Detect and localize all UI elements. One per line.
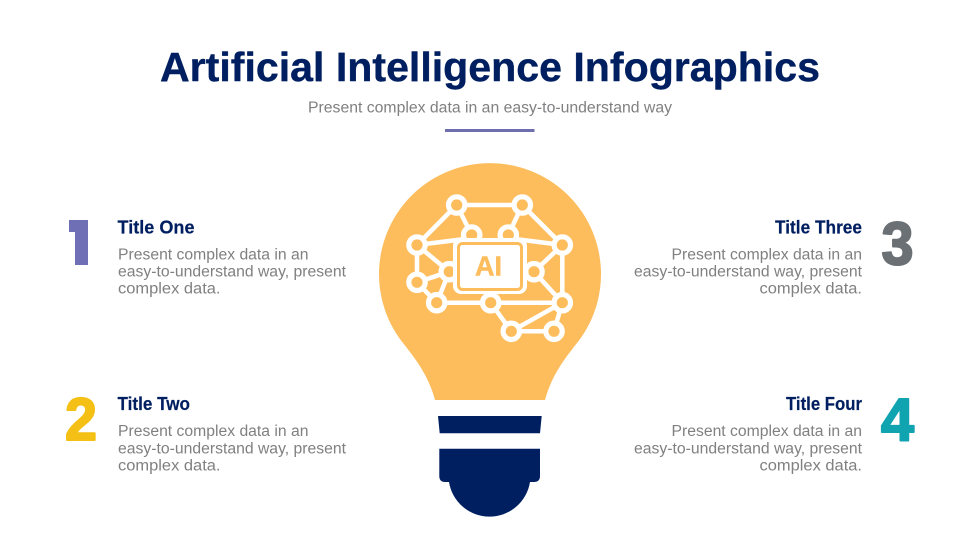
body text: item two: complex data. [118,457,220,474]
bulb glass [379,163,601,400]
panel: item three [634,210,914,298]
body text: item four [634,423,863,474]
body text: item two: easy-to-understand way, present [118,440,347,457]
heading: title four: Title Four [786,394,862,414]
body text: item two [118,423,347,474]
icon: AI brain network [409,197,570,339]
body text: item one [118,246,347,298]
bulb screw base [439,449,540,517]
network connections [417,205,562,331]
subtitle: Present complex data in an easy-to-understand way [308,99,672,116]
number 1: 1 [64,205,98,279]
icon: light bulb [379,163,601,517]
number 4: 4 [881,387,915,454]
body text: item one: complex data. [118,281,220,298]
body text: item three: easy-to-understand way, present [634,264,863,281]
panel: item two [65,386,347,474]
panel: item one [69,220,346,297]
body text: item four: Present complex data in an [672,423,862,440]
body text: item four: easy-to-understand way, present [634,440,863,457]
body text: item three [634,246,863,298]
title underline accent [445,129,534,132]
body text: item four: complex data. [760,457,862,474]
network nodes [409,197,570,339]
AI chip: AI [475,251,502,282]
AI chip [453,238,527,294]
body text: item one: easy-to-understand way, present [118,264,347,281]
body text: item three: complex data. [760,281,862,298]
body text: item one: Present complex data in an [118,246,308,263]
panel: item four [634,387,915,474]
title: Artificial Intelligence Infographics [160,44,820,90]
heading: title one: Title One [118,217,194,237]
heading: title two: Title Two [118,394,190,414]
number 3: 3 [882,210,914,277]
number 2: 2 [65,386,97,453]
heading: title three: Title Three [775,217,862,237]
bulb collar band [438,416,542,433]
body text: item three: Present complex data in an [672,246,862,263]
body text: item two: Present complex data in an [118,423,308,440]
